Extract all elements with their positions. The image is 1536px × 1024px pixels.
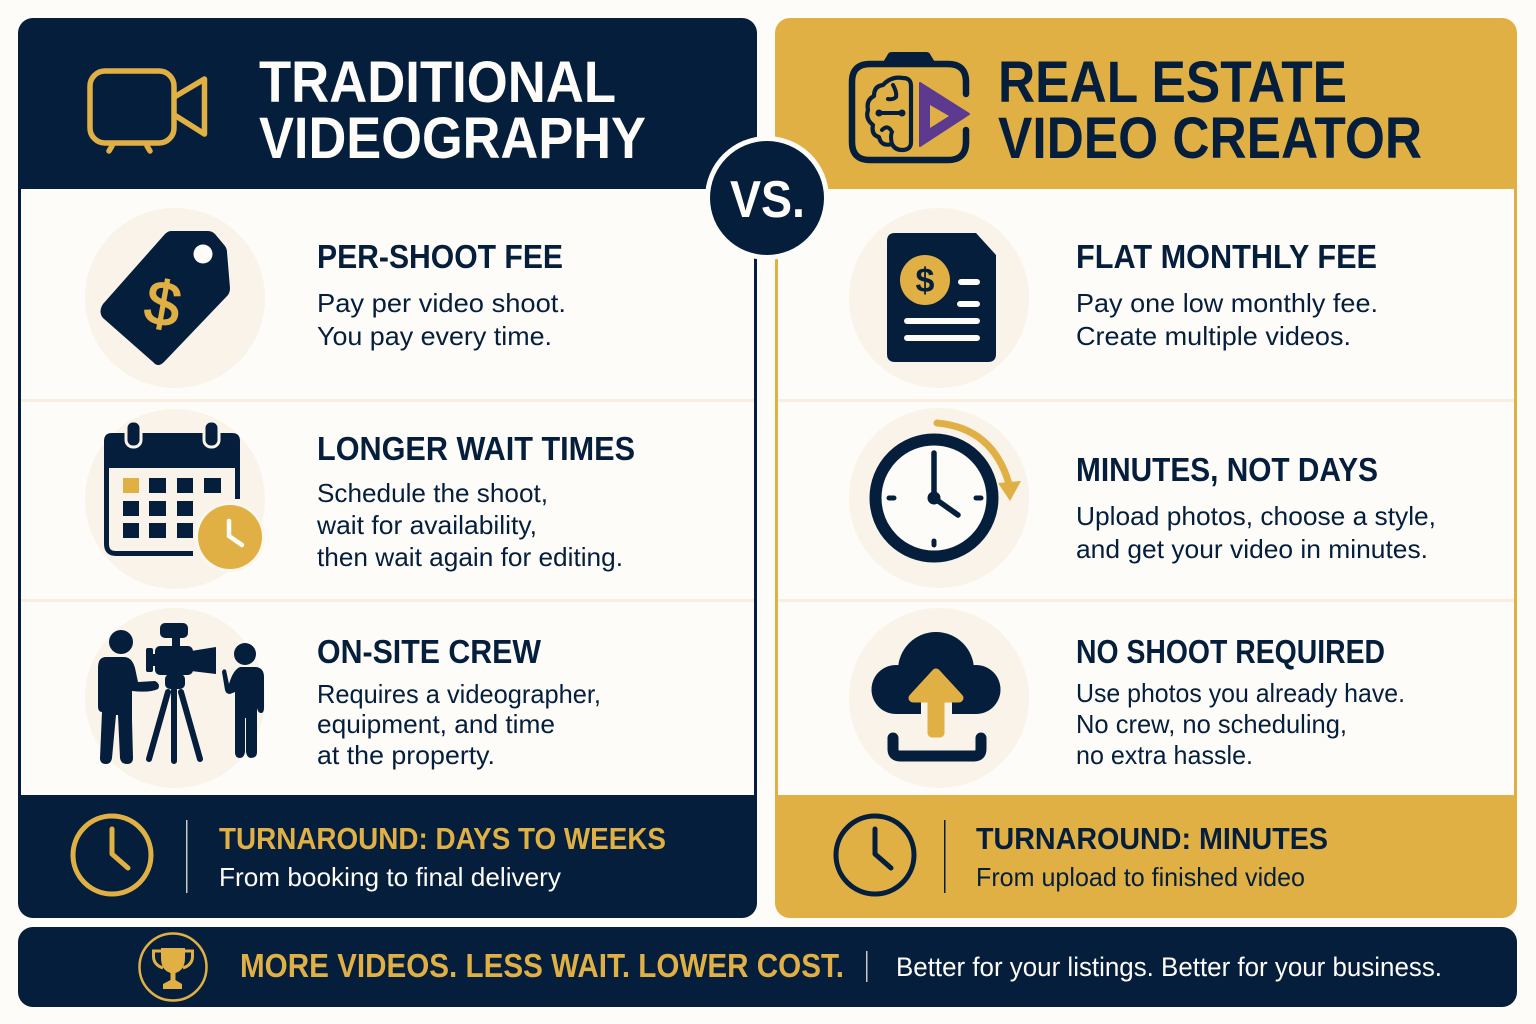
text: no shoot required: no extra hassle. xyxy=(1076,740,1253,770)
row: per-shoot fee xyxy=(85,208,566,388)
row: no shoot required xyxy=(849,608,1405,788)
text: flat monthly fee: FLAT MONTHLY FEE xyxy=(1076,238,1377,275)
row: longer wait times xyxy=(85,409,635,589)
icon: price tag xyxy=(85,208,265,388)
row: on-site crew xyxy=(85,608,601,788)
heading: traditional videography: TRADITIONAL xyxy=(259,50,616,115)
text: on-site crew: Requires a videographer, xyxy=(317,679,601,709)
text: more videos less wait lower cost: MORE VIDEOS. LESS WAIT. LOWER COST. xyxy=(240,947,844,984)
text: minutes not days xyxy=(1076,451,1436,564)
footer: turnaround minutes xyxy=(836,816,1328,894)
panel: real estate video creator xyxy=(775,18,1517,918)
text: turnaround minutes: From upload to finished video xyxy=(976,862,1305,892)
heading: real estate video creator: VIDEO CREATOR xyxy=(998,106,1422,171)
text: turnaround minutes xyxy=(976,821,1328,892)
badge: vs: VS. xyxy=(730,171,805,229)
row: flat monthly fee xyxy=(849,208,1378,388)
panel: traditional videography xyxy=(18,18,757,918)
text: longer wait times: Schedule the shoot, xyxy=(317,478,548,508)
text: turnaround minutes: TURNAROUND: MINUTES xyxy=(976,821,1328,856)
text: turnaround days to weeks: TURNAROUND: DAYS TO WEEKS xyxy=(219,821,666,856)
heading: real estate video creator xyxy=(998,50,1422,171)
icon: trophy xyxy=(140,934,206,1000)
text: longer wait times: then wait again for editing. xyxy=(317,542,623,572)
text: per-shoot fee xyxy=(317,238,566,351)
text: minutes not days: Upload photos, choose a style, xyxy=(1076,501,1436,531)
row: minutes not days xyxy=(849,408,1436,588)
text: per-shoot fee: PER-SHOOT FEE xyxy=(317,238,563,275)
text: minutes not days: MINUTES, NOT DAYS xyxy=(1076,451,1378,488)
heading: traditional videography: VIDEOGRAPHY xyxy=(259,106,646,171)
icon: film crew with camera xyxy=(85,608,265,788)
icon: calendar with clock xyxy=(85,409,265,589)
icon: invoice document: $ xyxy=(916,262,935,300)
heading: real estate video creator: REAL ESTATE xyxy=(998,50,1347,115)
text: turnaround days to weeks xyxy=(219,821,666,892)
text: no shoot required xyxy=(1076,633,1405,770)
icon: video camera xyxy=(90,71,204,151)
banner: summary xyxy=(18,927,1517,1007)
text: on-site crew: at the property. xyxy=(317,740,495,770)
icon: price tag: $ xyxy=(140,268,186,341)
text: flat monthly fee: Create multiple videos. xyxy=(1076,321,1351,351)
text: no shoot required: No crew, no scheduling, xyxy=(1076,709,1347,739)
text: better for your listings: Better for your listings. Better for your business. xyxy=(896,952,1442,982)
text: on-site crew xyxy=(317,633,601,770)
text: flat monthly fee xyxy=(1076,238,1378,351)
text: per-shoot fee: Pay per video shoot. xyxy=(317,288,566,318)
footer: turnaround days to weeks xyxy=(73,816,666,894)
heading: traditional videography xyxy=(259,50,646,171)
text: on-site crew: ON-SITE CREW xyxy=(317,633,542,670)
text: flat monthly fee: Pay one low monthly fee. xyxy=(1076,288,1378,318)
text: per-shoot fee: You pay every time. xyxy=(317,321,552,351)
text: on-site crew: equipment, and time xyxy=(317,709,555,739)
text: longer wait times: wait for availability, xyxy=(316,510,537,540)
text: minutes not days: and get your video in minutes. xyxy=(1076,534,1428,564)
text: longer wait times: LONGER WAIT TIMES xyxy=(317,430,635,467)
icon: clock with arrow xyxy=(849,408,1029,588)
icon: invoice document xyxy=(849,208,1029,388)
badge: vs xyxy=(705,136,829,260)
icon: cloud upload xyxy=(849,608,1029,788)
icon: clock gold xyxy=(73,816,151,894)
text: no shoot required: Use photos you already have. xyxy=(1076,678,1405,708)
text: no shoot required: NO SHOOT REQUIRED xyxy=(1076,633,1385,670)
text: longer wait times xyxy=(316,430,635,572)
text: turnaround days to weeks: From booking to final delivery xyxy=(219,862,561,892)
icon: AI video camera xyxy=(852,52,969,160)
icon: clock navy xyxy=(836,816,914,894)
